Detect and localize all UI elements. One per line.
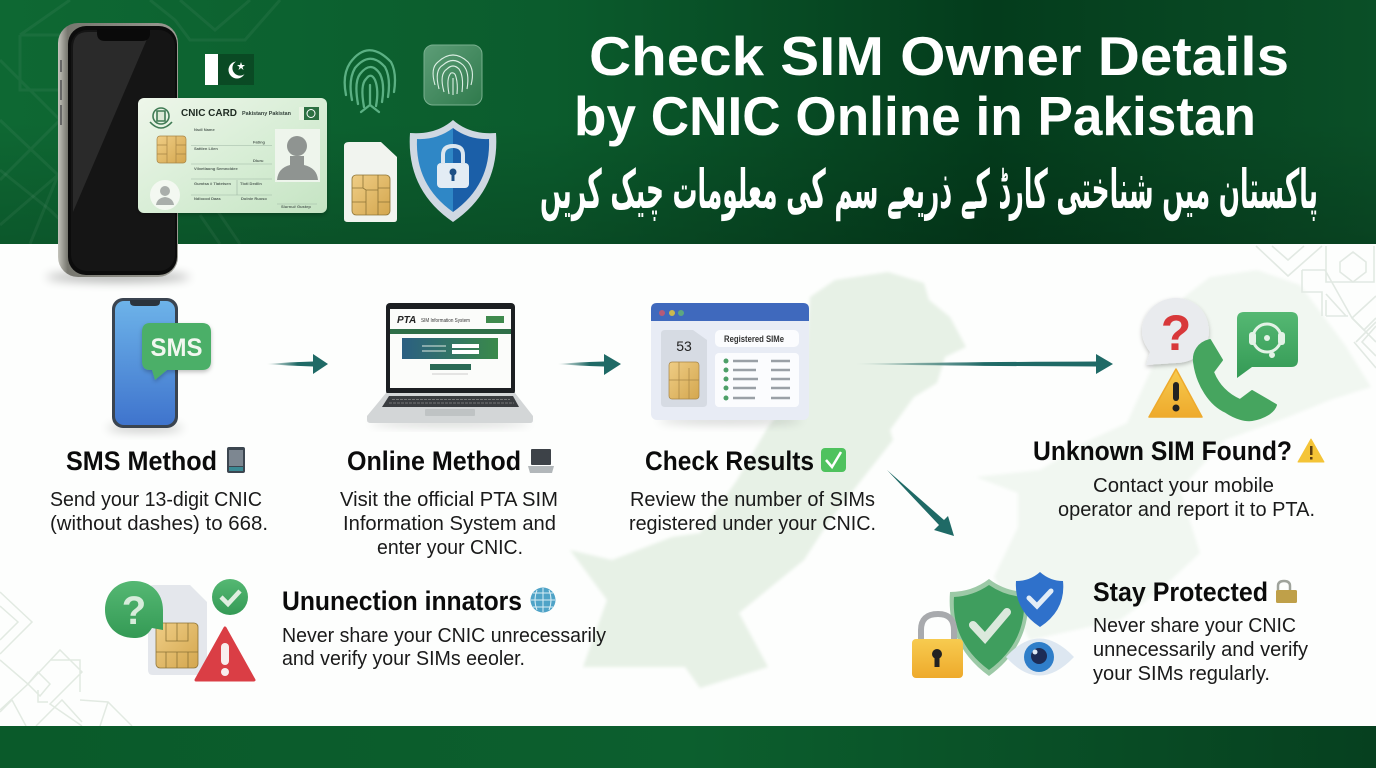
card chip	[157, 136, 186, 163]
check circle	[212, 579, 248, 615]
heading: Unknown SIM Found?	[1033, 436, 1292, 466]
step 2: online method laptop icon	[367, 303, 533, 426]
step 1 text	[50, 446, 268, 535]
title: by CNIC Online in Pakistan	[574, 85, 1256, 147]
emoji: check box	[821, 448, 846, 472]
stay protected text block	[1093, 577, 1308, 685]
CNIC card illustration	[138, 98, 327, 213]
PTA logo text: PTA	[397, 315, 416, 326]
SIM with count: 53	[676, 338, 692, 354]
description: operator and report it to PTA.	[1058, 499, 1315, 521]
laptop base	[367, 393, 533, 423]
description: Never share your CNIC unrecessarily	[282, 625, 606, 647]
telephone handset	[1194, 340, 1276, 420]
hero illustration: smartphone	[46, 23, 190, 282]
arrow 2	[558, 354, 621, 375]
tip text block	[282, 586, 606, 670]
description: registered under your CNIC.	[629, 513, 876, 535]
emoji: warning	[1298, 439, 1324, 462]
icon: SIM card	[344, 142, 397, 222]
step 3: results window icon	[651, 303, 809, 424]
blue shield	[1016, 572, 1063, 627]
emoji: phone	[227, 447, 245, 473]
question bubble: ?	[122, 589, 146, 633]
step 1: SMS method icon	[107, 298, 211, 432]
description: Never share your CNIC	[1093, 615, 1296, 637]
card portrait	[275, 129, 320, 182]
card fields	[191, 127, 317, 209]
icon: blue shield with padlock	[410, 120, 496, 222]
description: Send your 13-digit CNIC	[50, 489, 262, 511]
emoji: laptop	[528, 449, 554, 473]
description	[1058, 475, 1315, 521]
description	[282, 625, 606, 670]
card fields: Slurnu# Gustep	[281, 204, 311, 209]
description: Review the number of SIMs	[630, 489, 875, 511]
emoji: lock	[1276, 581, 1297, 603]
description	[1093, 615, 1308, 685]
card subtitle: Pakistany Pakistan	[242, 111, 291, 117]
description: your SIMs regularly.	[1093, 663, 1270, 685]
heading: Check Results	[645, 446, 814, 476]
SIM with count	[661, 330, 707, 407]
icon: fingerprint outline	[345, 50, 395, 112]
description: Visit the official PTA SIM	[340, 489, 558, 511]
stay protected icon group	[912, 572, 1074, 678]
decorative pattern: top-right	[1256, 246, 1376, 368]
padlock	[912, 614, 963, 678]
card fields: Tlotl Dedlln	[240, 181, 262, 186]
step 3 text	[629, 446, 876, 535]
header band	[0, 0, 1376, 244]
card mini flag	[299, 107, 319, 120]
card emblem	[150, 108, 172, 128]
description	[50, 489, 268, 535]
step 4 text	[1033, 436, 1324, 521]
step 2: online method laptop icon: SIM Information System	[421, 318, 470, 324]
step 2 text	[340, 446, 558, 559]
heading: Online Method	[347, 446, 521, 476]
warning triangle	[1149, 369, 1202, 417]
card title: CNIC CARD	[181, 108, 237, 119]
description	[629, 489, 876, 535]
card fields: Ndlocod Daas	[194, 196, 221, 201]
description: Information System and	[343, 513, 556, 535]
card fields: Gumtsa # Tlatetsen	[194, 181, 231, 186]
card fields: Sattlen Lilen	[194, 146, 218, 151]
question bubble: ?	[1161, 305, 1191, 361]
description: enter your CNIC.	[377, 537, 523, 559]
decorative pattern: bottom-left	[0, 592, 132, 726]
arrow 4	[887, 470, 954, 536]
map: Pakistan silhouette right	[976, 270, 1371, 640]
card small portrait	[150, 180, 180, 210]
green shield	[950, 579, 1028, 676]
card fields: Dluru	[253, 158, 264, 163]
bottom-left SIM warning icon group	[105, 579, 254, 680]
registered label: Registered SIMe	[724, 334, 784, 345]
heading: Ununection innators	[282, 586, 522, 616]
list rows	[715, 353, 799, 407]
question bubble	[105, 581, 163, 638]
description	[340, 489, 558, 559]
SIM	[148, 585, 207, 675]
heading: SMS Method	[66, 446, 217, 476]
emoji: globe	[530, 588, 556, 612]
arrow 3	[856, 354, 1113, 374]
card fields: Vilxetlaong Semnoldee	[194, 166, 238, 171]
gold chip	[156, 623, 198, 668]
card fields: Dolnie Ruoso	[241, 196, 267, 201]
heading: Stay Protected	[1093, 577, 1268, 607]
card fields: Nsdl Name	[194, 127, 215, 132]
description: unnecessarily and verify	[1093, 639, 1308, 661]
description: (without dashes) to 668.	[50, 513, 268, 535]
login form	[402, 338, 498, 374]
question bubble	[1142, 298, 1209, 365]
arrow 1	[267, 354, 328, 374]
registered label	[715, 330, 799, 347]
title: Check SIM Owner Details	[589, 25, 1289, 87]
step 4: unknown SIM icon group	[1142, 298, 1298, 420]
alert triangle	[196, 628, 254, 680]
icon: Pakistan flag	[205, 54, 254, 85]
eye	[1006, 638, 1074, 676]
map: Pakistan silhouette centre	[570, 272, 966, 688]
chat headset bubble	[1237, 312, 1298, 378]
SMS speech bubble: SMS	[150, 334, 202, 362]
description: and verify your SIMs eeoler.	[282, 648, 525, 670]
footer band	[0, 726, 1376, 768]
decorative header pattern	[0, 0, 280, 244]
icon: fingerprint tile	[424, 45, 482, 105]
description: Contact your mobile	[1093, 475, 1274, 497]
title	[574, 25, 1289, 147]
card fields: Fating	[253, 140, 266, 144]
